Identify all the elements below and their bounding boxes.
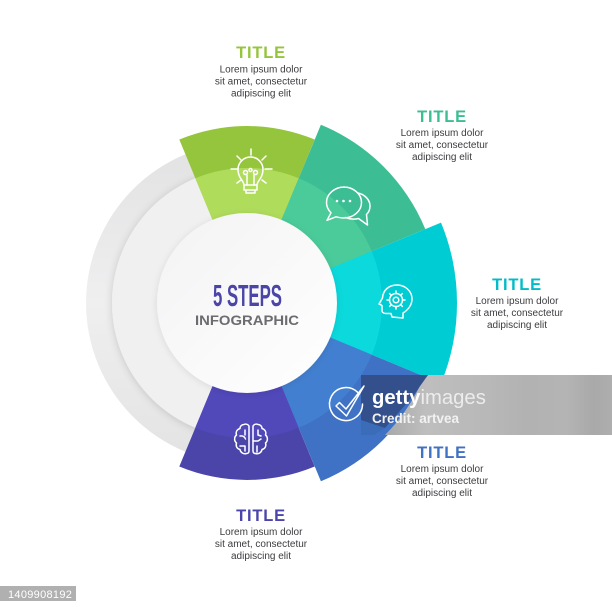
segment 1: green wedge bbox=[179, 126, 315, 303]
icon: brain bbox=[235, 424, 267, 454]
segment 2: teal wedge bbox=[247, 125, 425, 303]
callout 3: cyan title block bbox=[471, 276, 564, 331]
callout 2: teal title block bbox=[396, 108, 489, 163]
center subheading: infographic: INFOGRAPHIC bbox=[195, 312, 299, 328]
panel: grey background rings bbox=[86, 142, 408, 464]
segment 5: purple wedge bbox=[179, 303, 315, 480]
callout 2: teal title block: Lorem ipsum dolor bbox=[401, 128, 484, 139]
callout 3: cyan title block: Lorem ipsum dolor bbox=[476, 296, 559, 307]
watermark text: Credit: artvea bbox=[372, 411, 460, 426]
callout 1: green title block: adipiscing elit bbox=[231, 88, 291, 100]
callout 1: green title block: TITLE bbox=[236, 44, 286, 62]
center heading: 5 steps: 5 STEPS bbox=[213, 278, 282, 313]
callout 4: blue title block: Lorem ipsum dolor bbox=[401, 464, 484, 475]
callout 5: purple title block bbox=[215, 507, 308, 562]
callout 5: purple title block: sit amet, consectetur bbox=[215, 539, 308, 550]
callout 4: blue title block bbox=[396, 444, 489, 499]
callout 4: blue title block: TITLE bbox=[417, 444, 467, 462]
callout 1: green title block: Lorem ipsum dolor bbox=[220, 64, 303, 76]
callout 3: cyan title block: adipiscing elit bbox=[487, 320, 547, 331]
icon: light bulb bbox=[231, 149, 272, 193]
callout 1: green title block bbox=[215, 44, 308, 100]
icon: head with gear bbox=[379, 285, 412, 318]
callout 2: teal title block: sit amet, consectetur bbox=[396, 140, 489, 151]
callout 5: purple title block: TITLE bbox=[236, 507, 286, 525]
callout 4: blue title block: sit amet, consectetur bbox=[396, 476, 489, 487]
watermark text bbox=[372, 387, 486, 426]
callout 2: teal title block: TITLE bbox=[417, 108, 467, 126]
callout 3: cyan title block: TITLE bbox=[492, 276, 542, 294]
icon: check mark in circle bbox=[330, 386, 364, 421]
image id tag bbox=[0, 586, 76, 601]
watermark text: gettyimages bbox=[372, 387, 486, 409]
image id tag: 1409908192 bbox=[8, 589, 72, 601]
segment 4: blue wedge bbox=[247, 303, 425, 481]
watermark banner bbox=[361, 375, 612, 435]
callout 1: green title block: sit amet, consectetur bbox=[215, 76, 308, 88]
callout 3: cyan title block: sit amet, consectetur bbox=[471, 308, 564, 319]
center circle bbox=[157, 213, 337, 393]
callout 2: teal title block: adipiscing elit bbox=[412, 152, 472, 163]
callout 5: purple title block: adipiscing elit bbox=[231, 551, 291, 562]
segment 3: cyan wedge bbox=[247, 223, 457, 383]
callout 5: purple title block: Lorem ipsum dolor bbox=[220, 527, 303, 538]
callout 4: blue title block: adipiscing elit bbox=[412, 488, 472, 499]
icon: speech bubbles bbox=[326, 187, 370, 225]
